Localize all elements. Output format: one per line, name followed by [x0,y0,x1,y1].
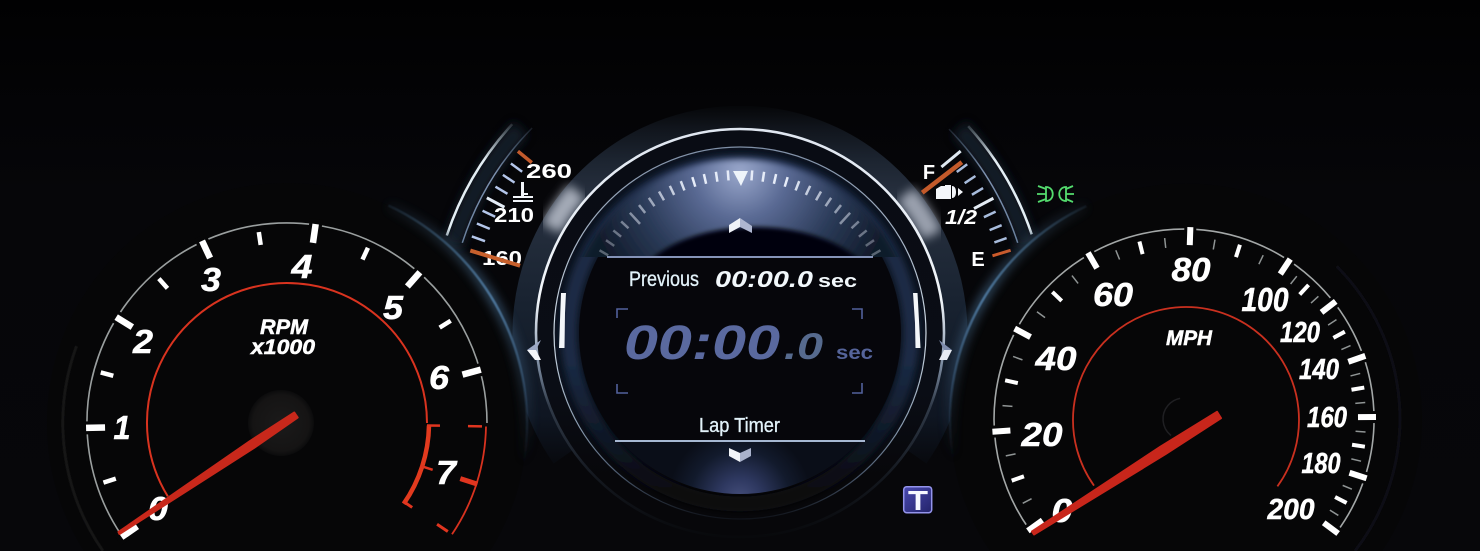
speedo major ticks [992,227,1376,533]
speedo hub ring [1154,389,1214,449]
tach numerals: 3 [201,261,221,298]
sweep ticks [600,170,880,255]
tach hub [248,390,314,456]
speedo small numerals: 180 [1302,448,1340,480]
previous label: Previous [629,268,699,291]
speedo numerals: 60 [1093,276,1134,313]
tach arc gaps [81,219,486,540]
temperature gauge: 210 [494,205,534,227]
tach numerals: 6 [429,359,450,396]
arrow right [939,340,952,360]
fuel gauge: F [923,162,935,184]
RPM label: RPM [260,316,309,339]
fuel gauge: 1/2 [945,207,977,229]
tach thick red arc [404,426,429,504]
speedo minor ticks [1002,238,1366,515]
arrow left [527,340,541,360]
speedo numerals: 100 [1242,281,1289,318]
speedo small numerals [1267,317,1347,526]
large tenths: .0 [784,326,824,367]
previous sec unit: sec [818,271,857,291]
temperature gauge: 260 [526,161,572,183]
headlight indicator [1037,186,1074,202]
divider: lower [615,440,865,442]
large time: 00:00 [624,317,780,370]
chevron up [729,218,752,233]
tach white ticks [86,224,481,537]
speedo arc gaps [989,224,1379,535]
traction icon [904,485,932,516]
display panel [579,257,901,494]
speedo numerals: 20 [1020,416,1063,453]
tach inner red arc [147,283,427,496]
tach needle [118,412,298,534]
instrument cluster [61,113,1402,551]
upper gauge dome [582,155,898,257]
center display [527,129,952,537]
top pointer [733,171,748,186]
speedo small numerals: 160 [1307,402,1347,434]
speedo numerals: 40 [1034,340,1077,377]
traction icon: T [908,485,928,516]
timer brackets [617,309,862,393]
previous time: 00:00.0 [715,266,813,292]
speedo small numerals: 140 [1299,354,1339,386]
divider: upper [607,256,873,258]
tachometer backing disc [47,183,527,551]
tachometer [81,219,487,540]
speedo small numerals: 200 [1267,494,1314,526]
speedo numerals: 0 [1052,492,1073,529]
tach outer arc [87,223,487,535]
speedo needle [1032,412,1221,534]
tach redline outer arc [452,426,486,534]
center bezel outer band [524,117,956,457]
fuel gauge: E [971,249,985,271]
temperature gauge: 160 [482,248,522,270]
speedometer backing disc [950,184,1422,551]
tach numerals: 1 [114,409,130,446]
speedometer [989,224,1379,535]
x1000 label: x1000 [250,336,315,359]
speedo medium ticks [1005,242,1365,503]
side bar right [913,293,920,348]
tach numerals: 2 [132,323,154,360]
tach numerals: 7 [436,454,458,491]
lap timer label: Lap Timer [699,415,780,437]
speedo small numerals: 120 [1280,317,1320,349]
large sec unit: sec [836,343,874,364]
speedo inner red arc [1073,307,1299,486]
tach numerals: 4 [290,248,312,285]
tach numerals: 0 [148,490,169,527]
tach numerals: 5 [383,289,404,326]
tach red ticks [403,425,482,531]
temperature gauge [447,124,572,270]
tach numerals [114,248,458,527]
speedo numerals [1020,251,1289,529]
chevron down [729,448,751,462]
side bar left [559,293,566,348]
blue glow ring [569,162,911,504]
MPH label: MPH [1166,327,1213,350]
fuel gauge [922,126,1032,271]
speedo numerals: 80 [1172,251,1211,288]
speedo outer arc [994,229,1374,532]
